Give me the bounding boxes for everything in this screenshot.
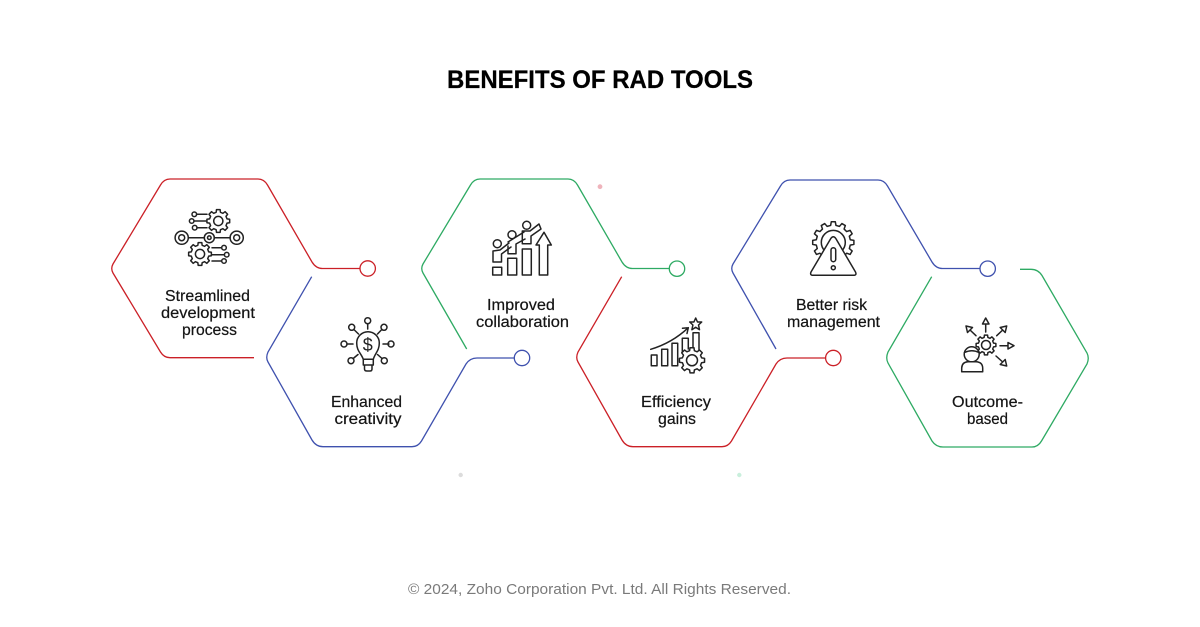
label: Improved [487, 297, 555, 314]
panel: outcome-based [887, 269, 1088, 447]
label [787, 297, 881, 331]
label: Enhanced [331, 394, 402, 411]
label: Better risk [796, 297, 867, 314]
footer copyright: © 2024, Zoho Corporation Pvt. Ltd. All Rights Reserved. [408, 581, 791, 598]
label: Streamlined [165, 288, 250, 305]
label: development [161, 305, 256, 322]
hexagon outline with red connector [112, 179, 375, 358]
panel: improved collaboration [422, 179, 685, 349]
icon: warning triangle over gear [811, 222, 856, 275]
label: creativity [334, 411, 402, 428]
icon: rising bars, star and gear [651, 318, 705, 373]
label [331, 394, 402, 428]
label [952, 394, 1023, 428]
label [641, 394, 711, 428]
panel: better risk management [732, 180, 995, 349]
label: management [787, 314, 881, 331]
hexagon outline in green [887, 269, 1088, 447]
label: based [967, 411, 1008, 428]
hexagon outline with blue connector [267, 277, 530, 447]
hexagon outline with green connector [422, 179, 685, 349]
label: Efficiency [641, 394, 711, 411]
hexagon outline with blue connector [732, 180, 995, 349]
panel: enhanced creativity [267, 277, 530, 447]
label [161, 288, 256, 339]
icon: person, gear and outcome arrows [962, 318, 1014, 372]
decorative dots [458, 184, 742, 477]
label: Outcome- [952, 394, 1023, 411]
panel: streamlined development process [112, 179, 375, 358]
title: BENEFITS OF RAD TOOLS [447, 66, 753, 94]
label: gains [658, 411, 696, 428]
label: process [182, 322, 237, 339]
icon: idea bulb with dollar sign: $ [363, 335, 373, 355]
label [476, 297, 569, 331]
icon: team climbing growth bars [493, 221, 551, 275]
hexagon outline with red connector [577, 277, 841, 447]
icon: idea bulb with dollar sign [341, 318, 394, 371]
label: collaboration [476, 314, 569, 331]
icon: gears and process nodes [175, 210, 243, 265]
panel: efficiency gains [577, 277, 841, 447]
